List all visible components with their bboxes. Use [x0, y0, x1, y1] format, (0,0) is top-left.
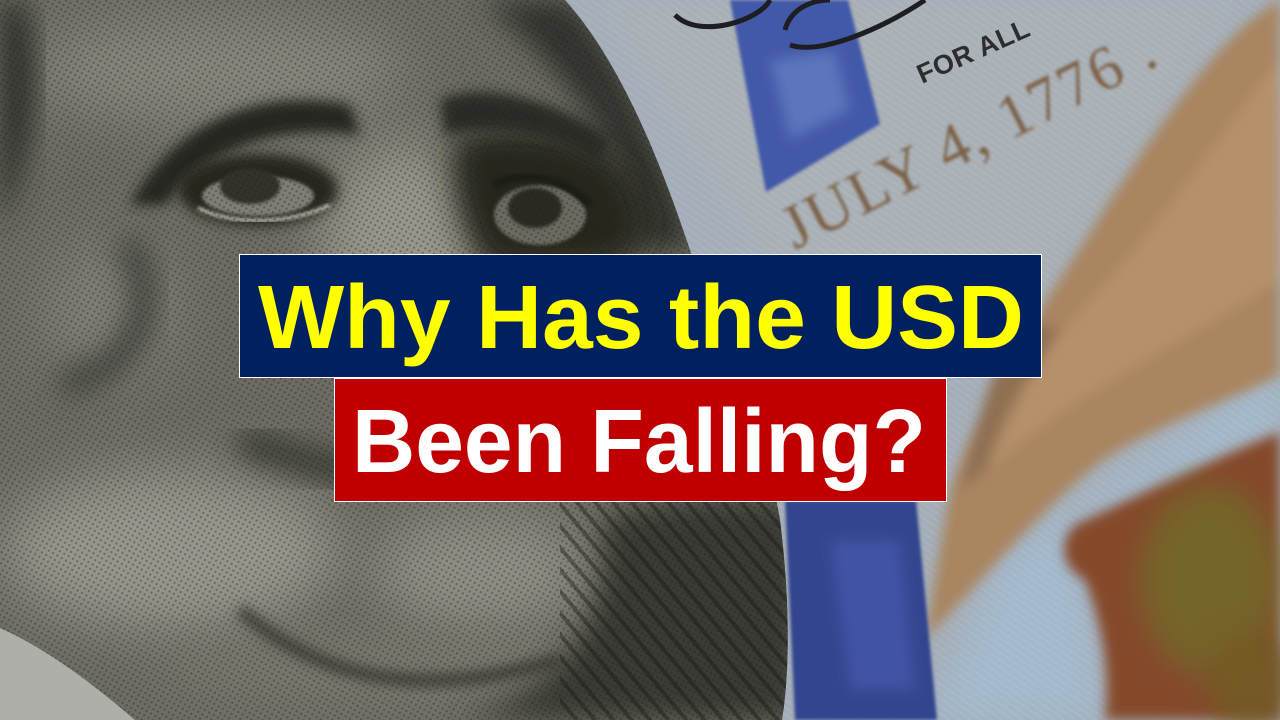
dark beard and hair lower right: [450, 499, 800, 720]
icon: left eye: [178, 154, 338, 226]
orange-brown seal corner: [1064, 432, 1280, 720]
signature flourish: [675, 0, 925, 47]
light cheeks and forehead: [30, 15, 410, 125]
text: date: JULY 4, 1776 .: [770, 16, 1167, 262]
bill lettering: [675, 0, 1167, 262]
dark hair upper right: [480, 0, 695, 250]
tan diagonal engraving band: [925, 0, 1280, 640]
title: first line: Why Has the USD: [258, 268, 1024, 368]
portrait: Benjamin Franklin face: [0, 0, 800, 720]
icon: right eye: [494, 177, 590, 245]
nose and mouth shadows: [60, 240, 144, 385]
blue security strip, top: [730, 0, 880, 192]
right brow: [440, 92, 610, 165]
right eye socket shadow: [454, 130, 646, 270]
text: for all: FOR ALL: [912, 13, 1034, 89]
title: second line: Been Falling?: [352, 392, 926, 492]
dark hair left edge: [0, 0, 35, 230]
engraving dot texture: [0, 0, 800, 720]
white collar bottom left: [0, 628, 135, 720]
left brow: [130, 100, 360, 205]
blue security strip, bottom: [785, 500, 937, 720]
